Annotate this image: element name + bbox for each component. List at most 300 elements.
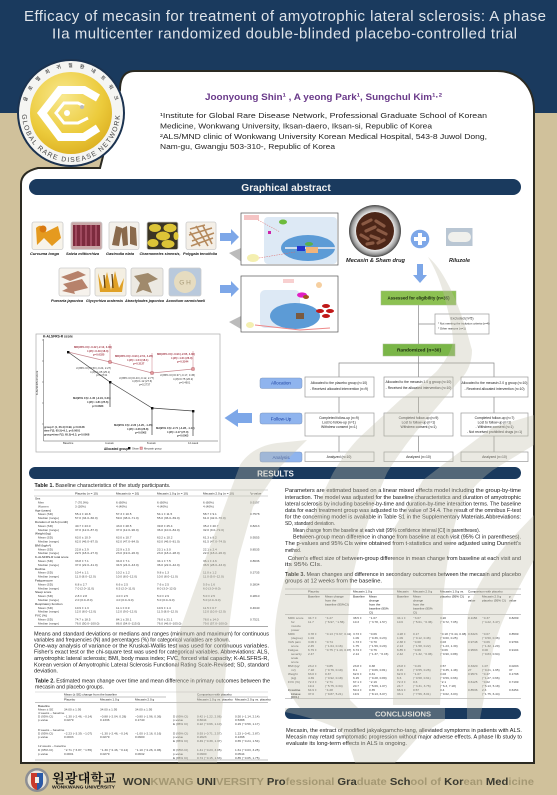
- table 3: secondary outcomes: (−5.69, 1.07): [369, 684, 387, 688]
- table 3: secondary outcomes: 37: [509, 668, 513, 672]
- table 2 notes (right column): The p-values and 95% CIs were obtained from t-statistics and were adjusted using Dunnett's: [285, 541, 521, 547]
- table 2: mean change and difference: E (95% CI): [173, 722, 188, 726]
- table 3: secondary outcomes: baseline (95%CI): [325, 602, 349, 606]
- table 3: secondary outcomes: 0.37: [325, 672, 331, 676]
- herb: Glycyrrhiza uralensis: [95, 268, 126, 296]
- table 3: secondary outcomes: 0.7199: [509, 680, 519, 684]
- table 3: secondary outcomes: 1.75: [353, 644, 359, 648]
- table 2: mean change and difference: 0.0003: [64, 735, 74, 739]
- herb labels row 1: Salvia miltiorrhiza: [66, 252, 99, 256]
- table 1: baseline characteristics: 4.0 ± 2.5: [116, 594, 128, 598]
- table 3: secondary outcomes: 0.3320: [468, 664, 478, 668]
- table 3: secondary outcomes: 0.6125: [468, 680, 478, 684]
- table 3: secondary outcomes: 62.6 ±: [353, 672, 362, 676]
- herb: Aconitum carmichaeli pill: [169, 268, 201, 296]
- table 1: baseline characteristics: 59.0 (38.0–71.0): [116, 516, 139, 520]
- table 2: mean change and difference: E (95% CI): [173, 756, 188, 760]
- table 3: secondary outcomes: −0.47: [482, 672, 490, 676]
- table 3: secondary outcomes: 0.9104: [509, 648, 519, 652]
- table 1: baseline characteristics: 57.3 ± 10.5: [116, 512, 132, 516]
- table 1: baseline characteristics: 4 (40%): [157, 504, 168, 508]
- table 3: secondary outcomes: 23.8 ±: [397, 664, 406, 668]
- line chart: K-ALSFRS-R score: MD(95% CI)=-0.93 (-2.51, 4.26): [115, 354, 153, 358]
- conclusions text: Mecasin, the extract of modified jakyakgamcho-tang, alleviated symptoms in patients with ALS.: [286, 728, 522, 734]
- table 3: secondary outcomes: (−7.56, 8.01): [413, 692, 431, 696]
- table 1: baseline characteristics: Mean (SD): [38, 512, 53, 516]
- table 3: secondary outcomes: 7.18: [308, 668, 314, 672]
- heading: conclusions: CONCLUSIONS: [375, 710, 431, 718]
- line chart: K-ALSFRS-R score: 4-week: [105, 441, 114, 445]
- table 3: secondary outcomes: 50.4 ±: [353, 688, 362, 692]
- herb labels row 2: Atractylodes japonica: [124, 299, 164, 303]
- table 3: secondary outcomes: value: [468, 598, 476, 602]
- herb labels row 2: [51, 299, 206, 303]
- table 3: secondary outcomes: 2.45: [308, 644, 314, 648]
- table 2: mean change and difference: p-value: [38, 752, 48, 756]
- table 1: baseline characteristics: 0.2810: [250, 594, 260, 598]
- table 3: secondary outcomes: 72.3 ±: [397, 680, 406, 684]
- line chart: K-ALSFRS-R score: t (df)=0.75 (26.2): [173, 377, 193, 381]
- table 3: secondary outcomes: 0.8536: [468, 688, 478, 692]
- table 2: mean change and difference: 0.0279: [64, 718, 74, 722]
- table 3: secondary outcomes: (−0.60, 0.25): [440, 636, 458, 640]
- table 2: mean change and difference: Mean ± SE: [38, 708, 53, 712]
- table 2: mean change and difference: D (95% CI): [173, 748, 188, 752]
- table 3: secondary outcomes: (−1.32, −0.06): [413, 652, 432, 656]
- footer: university name in Korean: WONKWANG UNIVERSITY: [52, 784, 115, 790]
- table 3: secondary outcomes: −0.13 (−0.67, 0.41): [325, 632, 351, 636]
- side label: follow-up: Follow-Up: [271, 416, 292, 422]
- table 1 notes: deviation.: [34, 668, 58, 674]
- table 1: baseline characteristics: 55.0 (36.0–69.0): [157, 516, 180, 520]
- line chart: K-ALSFRS-R score: p=0.2737: [139, 382, 151, 386]
- table 3: secondary outcomes: (−5.13, 5.18): [482, 684, 500, 688]
- table 1: baseline characteristics: 35.2 ± 20.7: [203, 524, 219, 528]
- table 2: mean change and difference: p-value: [38, 735, 48, 739]
- table 3: secondary outcomes: 0.6454: [509, 688, 519, 692]
- table 3: secondary outcomes: Baseline: [397, 594, 409, 598]
- table 1: baseline characteristics: 63.2 ± 10.2: [157, 536, 173, 540]
- table 1 title: Table 1. Baseline characteristics of the study participants.: [34, 483, 171, 489]
- table 3: secondary outcomes: 0.9574: [468, 672, 478, 676]
- affiliations: [160, 111, 487, 151]
- table 1: baseline characteristics: 12.0 (10.0–12.0): [203, 610, 226, 614]
- table 2: mean change and difference: −2.71 (−3.87, −1.55): [64, 748, 92, 752]
- table 3: secondary outcomes: 67.1 ±: [353, 680, 362, 684]
- table 2: mean change and difference: Mean (± SE) change from the baseline: [64, 692, 117, 696]
- label: riluzole: Riluzole: [449, 258, 470, 264]
- table 1: baseline characteristics: 62.0 (47.0–84.0): [116, 540, 139, 544]
- table 3: secondary outcomes: 0.6: [413, 680, 418, 684]
- table 1: baseline characteristics: Mean (SD): [38, 582, 53, 586]
- table 1: baseline characteristics: 5.0 (0.0–9.0): [157, 598, 175, 602]
- logo: global rare disease network: GLOBAL RARE DISEASE NETWORK: [22, 114, 120, 162]
- line chart: K-ALSFRS-R score: Md(95% CI)=-1.30 (-2.91, 0.21): [73, 396, 111, 400]
- table 1: baseline characteristics: 10.0 (8.0–12.0): [116, 575, 137, 579]
- table 3: secondary outcomes: (−0.55, 0.26): [413, 668, 431, 672]
- table 3: secondary outcomes: (−1.27, 0.66): [482, 676, 500, 680]
- table 1: baseline characteristics: Mecasin 2.0 g (n = 10): [203, 492, 234, 496]
- table 1: baseline characteristics: 10.9 ± 1.3: [75, 606, 89, 610]
- table 3: secondary outcomes: 0.17: [413, 632, 419, 636]
- table 3: secondary outcomes: 64.9 ±: [308, 688, 317, 692]
- table 1: baseline characteristics: 4 (40%): [116, 504, 127, 508]
- table 3: secondary outcomes: 0.03: [440, 640, 446, 644]
- table 3: secondary outcomes: p: [509, 594, 511, 598]
- table 3: secondary outcomes: 10.6: [397, 620, 403, 624]
- table 1: baseline characteristics: 23.0 (18.2–28.0): [157, 551, 180, 555]
- table 3: secondary outcomes: −2.19: [369, 680, 377, 684]
- table 3: secondary outcomes: VAS pain: [288, 640, 301, 644]
- line chart: K-ALSFRS-R score: p=0.3127: [133, 362, 145, 366]
- side label: analysis: [260, 452, 302, 462]
- table 3: secondary outcomes: Mecasin: [397, 590, 409, 594]
- table 3: secondary outcomes: −0.06: [482, 640, 490, 644]
- flow box: randomized: Randomized (n=30): [397, 348, 441, 354]
- table 1: baseline characteristics: Mean (SD): [38, 618, 53, 622]
- table 2: mean change and difference: Baseline: [38, 704, 50, 708]
- table 1: baseline characteristics: 5.9 ± 1.6: [203, 582, 215, 586]
- table 3: secondary outcomes: 3.06 ±: [308, 640, 317, 644]
- table 1 notes: Fisher's exact test or the chi-square test was used for categorical variables. Abbreviations: ALS,: [34, 650, 269, 656]
- table 3: secondary outcomes: −0.74: [325, 640, 333, 644]
- table 3: secondary outcomes: 1.07: [482, 664, 488, 668]
- table 3: secondary outcomes: Mean change: [325, 594, 344, 598]
- table 2: mean change and difference: 1.61 (−0.03, 3.25): [235, 748, 260, 752]
- table 1: baseline characteristics: 78.0 ± 14.0: [203, 618, 219, 622]
- table 2: mean change and difference: p-value: [173, 718, 183, 722]
- table 2 notes (right column): its 95% CIs.: [285, 562, 322, 568]
- table 1: baseline characteristics: 5.0 ± 2.9: [157, 594, 169, 598]
- table 1: baseline characteristics: 6 (60%): [203, 500, 214, 504]
- table 2: mean change and difference: 8 weeks – baseline: [38, 728, 65, 732]
- table 3: secondary outcomes: 6.15: [353, 676, 359, 680]
- table 3: secondary outcomes: baseline (95%: [369, 606, 389, 610]
- line chart: K-ALSFRS-R score: t (df)=-1.04 (18.1): [127, 358, 149, 362]
- table 3: secondary outcomes: from the: [413, 602, 425, 606]
- table 3: secondary outcomes: 0.9593: [468, 648, 478, 652]
- table 3: secondary outcomes: −0.06: [369, 632, 377, 636]
- table 1 notes: Means and standard deviations or medians and ranges (minimum and maximum) for continuous: [34, 632, 269, 638]
- table 2: mean change and difference: 0.1398: [235, 735, 245, 739]
- flow boxes: analysis: Analyzed (n=10): [406, 455, 431, 459]
- table 1: baseline characteristics: Respiratory function: [35, 602, 63, 606]
- line chart: K-ALSFRS-R score: t (df)=1.12 (27.6): [132, 379, 152, 383]
- table 3 title: [285, 572, 521, 584]
- table 3: secondary outcomes: 6.6: [397, 676, 402, 680]
- logo: global rare disease network: 글로벌희귀질환네트워크: [22, 62, 118, 102]
- table 2: mean change and difference: p-value: [173, 735, 183, 739]
- table 1: baseline characteristics: 22.9 ± 2.5: [116, 547, 130, 551]
- table 3: secondary outcomes: 2.14: [353, 652, 359, 656]
- line chart: K-ALSFRS-R score: p=0.3244: [177, 360, 189, 364]
- table 3: secondary outcomes: [285, 589, 521, 699]
- authors: Joonyoung Shin¹ , A yeong Park¹, Sungchul Kim¹·²: [205, 92, 442, 102]
- table 3: secondary outcomes: Mean: [369, 594, 377, 598]
- table 2: mean change and difference: −1.30 (−2.46, −0.14): [100, 748, 128, 752]
- flow boxes: follow-up: Lost to follow-up (n=1): [402, 420, 435, 424]
- table 3: secondary outcomes: Baseline: [308, 594, 320, 598]
- table 3: secondary outcomes: power: [291, 628, 299, 632]
- flow boxes: allocation: - Received allocated intervention (n=9): [310, 387, 368, 391]
- table 3: secondary outcomes: −0.29: [413, 664, 421, 668]
- table 3: secondary outcomes: 72.3 ±: [308, 680, 317, 684]
- table 1: baseline characteristics: 33.8 ± 7.1: [75, 559, 89, 563]
- table 1 notes: amyotrophic lateral sclerosis; BMI, body mass index; FVC, forced vital capacity; K-ALSFRS-R,: [34, 656, 269, 662]
- table 2: mean change and difference: D (95% CI): [38, 748, 53, 752]
- table 3: secondary outcomes: (−1.75, 6.44): [482, 692, 500, 696]
- table 3: secondary outcomes: (−1.32, 1.20): [482, 644, 500, 648]
- flow boxes: analysis: Analyzed (n=10): [327, 455, 351, 459]
- table 3: secondary outcomes: −2.1: [440, 680, 446, 684]
- heading: graphical abstract: [29, 179, 521, 195]
- icon: riluzole tablet: [446, 228, 472, 246]
- line chart: K-ALSFRS-R score: t (df)=-1.81 (25.6): [87, 400, 109, 404]
- table 2: mean change and difference: Mecasin 2.0 g vs. placebo: [235, 698, 271, 702]
- line chart: K-ALSFRS-R score: MD(95% CI)=-0.42 (-2.12, 3.06): [74, 345, 112, 349]
- table 1: baseline characteristics: 0.7521: [250, 618, 260, 622]
- table 2: mean change and difference: 0.85 (−0.05, 1.75): [235, 756, 260, 760]
- table 1: baseline characteristics: Median (range): [38, 563, 59, 567]
- table 2 notes (right column): Mean change from the baseline at each visit (95% confidence interval [CI] in parentheses).: [293, 528, 480, 534]
- icon: plus: [411, 230, 429, 248]
- table 3: secondary outcomes: Weight: [288, 672, 298, 676]
- flow box: excluded: [435, 314, 490, 334]
- table 3: secondary outcomes: Mecasin 2.0 g: [482, 594, 502, 598]
- table 3: secondary outcomes: (−0.36, 0.23): [369, 636, 387, 640]
- table 3: secondary outcomes: −0.70: [369, 640, 377, 644]
- table 2: mean change and difference: Mecasin 1.0 g: [100, 698, 120, 702]
- table 3: secondary outcomes: −0.68: [413, 640, 421, 644]
- side label: allocation: [260, 378, 302, 388]
- table 1: baseline characteristics: 43.0 ± 28.5: [116, 524, 132, 528]
- flow boxes: follow-up: Withdrew consent (n=1): [321, 425, 357, 429]
- table 3: secondary outcomes: Mecasin 2.0 g: [413, 590, 433, 594]
- table 3: secondary outcomes: MRC score: [288, 616, 304, 620]
- table 1: baseline characteristics: 0.3735: [250, 571, 260, 575]
- arrow: herbs to mechanism 2: [220, 281, 239, 297]
- table 3: secondary outcomes: 0.0203: [509, 664, 519, 668]
- table 1: baseline characteristics: Mean (SD): [38, 559, 53, 563]
- herb: Chaenomeles sinensis: [147, 222, 178, 250]
- flow boxes: allocation: [305, 377, 528, 397]
- table 1: baseline characteristics: Decline: [35, 567, 46, 571]
- table 2: mean change and difference: 0.0632: [135, 752, 145, 756]
- table 1: baseline characteristics: 11.5 ± 0.7: [203, 606, 217, 610]
- table 1: baseline characteristics: 0.9197: [250, 500, 260, 504]
- table 2: mean change and difference: 0.42 (−1.22, 2.06): [197, 714, 222, 718]
- table 1: baseline characteristics: Median (range): [38, 586, 59, 590]
- table 2: mean change and difference: 1.23 (−0.41, 2.87): [235, 732, 260, 736]
- table 1: baseline characteristics: 40.7 ± 23.0: [75, 524, 91, 528]
- table 2: mean change and difference: 0.1336: [100, 718, 110, 722]
- table 3: secondary outcomes: (−1.37, −0.15): [369, 652, 388, 656]
- flow box: randomized: [383, 344, 455, 356]
- table 3: secondary outcomes: (−1.59, 0.20): [369, 644, 387, 648]
- line chart: K-ALSFRS-R score: 8-week: [147, 441, 156, 445]
- table 2: mean change and difference: −2.23 (−3.39, −1.07): [64, 732, 92, 736]
- table 3: secondary outcomes: 0.9748: [468, 640, 478, 644]
- table 3: secondary outcomes: Baseline: [353, 594, 365, 598]
- table 1: baseline characteristics: Mecasin 1.0 g (n = 10): [157, 492, 188, 496]
- flow box: excluded: * Not meeting the inclusion criteria (n=4): [438, 322, 490, 326]
- table 3: secondary outcomes: −3.07: [413, 616, 421, 620]
- table 3: secondary outcomes: (−9.87, 5.21): [325, 692, 343, 696]
- side label: analysis: Analysis: [272, 455, 290, 460]
- table 1: baseline characteristics: 0.8636: [250, 559, 260, 563]
- table 3: secondary outcomes: (−6.3, 7.18): [440, 684, 456, 688]
- table 1: baseline characteristics: Median (range): [38, 540, 59, 544]
- table 1: baseline characteristics: 10.2 ± 1.2: [116, 571, 130, 575]
- table 3: secondary outcomes: kinase: [291, 692, 301, 696]
- table 2 notes (right column): SD, standard deviation.: [285, 521, 335, 527]
- line chart: K-ALSFRS-R score: d (95% CI)=0.50 (-0.24, 2.27): [76, 366, 111, 370]
- table 3: secondary outcomes: CI): [369, 610, 373, 614]
- line chart: K-ALSFRS-R score: t (df)=-0.49 (18.3): [87, 349, 109, 353]
- table 3: secondary outcomes: 33.1: [397, 692, 403, 696]
- conclusions text: evaluate its long-term effects in ALS is ongoing.: [286, 741, 407, 747]
- table 2: mean change and difference: −1.10 (−2.26, 0.06): [135, 748, 161, 752]
- table 3: secondary outcomes: Mecasin 1.0 g vs.: [440, 590, 464, 594]
- table 1: baseline characteristics: 0.8213: [250, 524, 260, 528]
- table 3 title: groups at 12 weeks from the baseline.: [285, 578, 382, 584]
- table 1: baseline characteristics: 76.0 ± 21.1: [157, 618, 173, 622]
- table 3: secondary outcomes: (−3.78, 1.57): [369, 620, 387, 624]
- flow box: excluded: * Other reasons (n=1): [438, 326, 466, 330]
- table 3: secondary outcomes: (−6.97, −1.56): [325, 620, 344, 624]
- table 2: mean change and difference: 0.49 (−0.39, 1.37): [197, 739, 222, 743]
- flow boxes: analysis: [305, 452, 528, 462]
- table 2: mean change and difference: −0.88 (−2.04, 0.28): [100, 714, 126, 718]
- table 3: secondary outcomes: (−8.13, 6.07): [369, 692, 387, 696]
- table 1: baseline characteristics: Median (range): [38, 528, 59, 532]
- table 1: baseline characteristics: 11.0 ± 1.2: [203, 571, 217, 575]
- table 1: baseline characteristics: 34.0 ± 7.1: [116, 559, 130, 563]
- table 1: baseline characteristics: 22.0 (18.2–26.0): [203, 551, 226, 555]
- table 1: baseline characteristics: 22.1 ± 2.4: [203, 547, 217, 551]
- table 3: secondary outcomes: −0.85: [325, 664, 333, 668]
- affiliations: Nam-gu, Gwangju 503-310-, Republic of Korea: [160, 142, 335, 151]
- table 1: baseline characteristics: Fatiguescore: [35, 578, 53, 582]
- table 2: mean change and difference: −1.00 (−2.16, 0.16): [135, 732, 161, 736]
- table 1: baseline characteristics: Mecasin (n = 10): [116, 492, 139, 496]
- table 3: secondary outcomes: 63.0 ±: [308, 672, 317, 676]
- table 3: secondary outcomes: 4.28 ±: [397, 632, 406, 636]
- line chart: K-ALSFRS-R score: p=0.2741: [96, 373, 108, 377]
- table 3: secondary outcomes: scale: [291, 656, 299, 660]
- line chart: K-ALSFRS-R score: t (df)=1.05 (25.1): [90, 370, 110, 374]
- table 1: baseline characteristics: Mean (SD): [38, 606, 53, 610]
- table 3: secondary outcomes: Creatine: [288, 688, 301, 692]
- table 2 title: [35, 678, 270, 690]
- line chart: K-ALSFRS-R score: d (95% CI)=0.37 (-0.17, 3.45): [160, 373, 195, 377]
- flow box: assessed for eligibility: Assessed for eligibility (n=35): [387, 296, 450, 300]
- table 3: secondary outcomes: muscle: [291, 624, 301, 628]
- table 1: baseline characteristics: 0.7578: [250, 512, 260, 516]
- flow boxes: allocation: Allocated to the placebo group (n=10): [311, 381, 367, 385]
- table 1: baseline characteristics: 7 (70.0%): [75, 500, 88, 504]
- table 3: secondary outcomes: 3.73 ±: [353, 632, 362, 636]
- table 3: secondary outcomes: for: [291, 620, 295, 624]
- table 2: mean change and difference: 0.0279: [100, 752, 110, 756]
- table 3: secondary outcomes: 62.6 ±: [397, 672, 406, 676]
- table 1: baseline characteristics: Mean (SD): [38, 524, 53, 528]
- table 1: baseline characteristics: 62.0 (46.0–87.0): [75, 540, 98, 544]
- header band: [0, 0, 557, 113]
- flow boxes: follow-up: - Not received prohibited drugs (n=1): [467, 430, 522, 434]
- table 1: baseline characteristics: Weight (kg): [35, 532, 51, 536]
- table 2: mean change and difference: Comparison with placebo: [197, 692, 232, 696]
- table 3: secondary outcomes: Placebo: [308, 590, 319, 594]
- table 2 notes (right column): Cohen's effect size of between-group difference in mean change from baseline at each visit and: [288, 556, 521, 562]
- table 1: baseline characteristics: [34, 490, 268, 626]
- table 3: secondary outcomes: 4.39: [308, 676, 314, 680]
- table 3: secondary outcomes: m²): [291, 668, 296, 672]
- table 1: baseline characteristics: 79.0 (57.0–100.0): [203, 621, 227, 625]
- herb photos row 1: [32, 222, 216, 250]
- table 3: secondary outcomes: (−0.72, 7.05): [440, 620, 458, 624]
- table 1: baseline characteristics: 34.1 ± 7.5: [157, 559, 171, 563]
- table 3: secondary outcomes: 0.57: [413, 688, 419, 692]
- table 1: baseline characteristics: 9.8 ± 1.3: [157, 571, 169, 575]
- table 2: mean change and difference: −1.30 (−2.46, −0.14): [64, 714, 92, 718]
- table 1: baseline characteristics: 12.0 (8.0–12.0): [75, 610, 96, 614]
- title: [24, 8, 546, 42]
- table 1: baseline characteristics: 74.7 ± 18.5: [75, 618, 91, 622]
- table 3: secondary outcomes: 19.4: [308, 684, 314, 688]
- table 1: baseline characteristics: Median (range): [38, 575, 59, 579]
- table 1: baseline characteristics: 37.0 (22.0–41.0): [75, 563, 98, 567]
- table 1: baseline characteristics: 76.0 (46.0–105.0): [157, 621, 181, 625]
- table 3: secondary outcomes: (−0.06, 0.81): [369, 668, 387, 672]
- table 1: baseline characteristics: 5.0 ± 2.5: [203, 594, 215, 598]
- table 3: secondary outcomes: 0.8299: [509, 616, 519, 620]
- table 1: baseline characteristics: 0.9555: [250, 536, 260, 540]
- herb photos row 2: [59, 268, 201, 296]
- table 1: baseline characteristics: 36.1 ± 4.6: [203, 559, 217, 563]
- table 2: mean change and difference: p-value: [173, 752, 183, 756]
- table 3: secondary outcomes: 6.79 ±: [308, 648, 317, 652]
- table 1: baseline characteristics: 11.1 ± 0.9: [116, 606, 130, 610]
- table 3: secondary outcomes: 0.00: [482, 648, 488, 652]
- table 1: baseline characteristics: 34.5 (24.0–43.0): [116, 563, 139, 567]
- line chart: K-ALSFRS-R score: d (95% CI)=0.43 (-0.12, 2.77): [119, 376, 154, 380]
- footer: university name in Korean: 원광대학교: [52, 768, 116, 787]
- table 3: secondary outcomes: (IU/L): [291, 695, 299, 699]
- table 3: secondary outcomes: −1.07: [413, 672, 421, 676]
- mechanism diagram 1: [229, 213, 338, 265]
- table 1: baseline characteristics: 37.0 (12.0–87.0): [75, 528, 98, 532]
- line chart: K-ALSFRS-R score: Md(95% CI)=-2.23 (-4.20, -1.45): [114, 423, 153, 427]
- table 3: secondary outcomes: 23.8 ±: [353, 664, 362, 668]
- table 3: secondary outcomes: 38.5 ±: [353, 616, 362, 620]
- table 3: secondary outcomes: −0.07: [482, 632, 490, 636]
- herb labels row 1: Chaenomeles sinensis,: [140, 252, 180, 256]
- table 2: mean change and difference: 0.0279: [100, 735, 110, 739]
- table 2: mean change and difference: 4 weeks – baseline: [38, 711, 65, 715]
- table 1: baseline characteristics: 36.0 (22.0–42.0): [157, 563, 180, 567]
- table 1: baseline characteristics: 61.5 (47.0–74.0): [203, 540, 226, 544]
- table 2 title: Table 2. Estimated mean change over time and mean difference in primary outcomes between the: [35, 678, 270, 684]
- affiliations: Medicine, Wonkwang University, Iksan-daero, Iksan-si, Republic of Korea: [160, 122, 432, 130]
- table 3: secondary outcomes: from the: [369, 602, 381, 606]
- table 1: baseline characteristics: 12.0 (9.0–12.0): [116, 610, 137, 614]
- table 3: secondary outcomes: 37.0: [308, 692, 314, 696]
- table 1: baseline characteristics: K-ALSFRS-R total score: [35, 555, 69, 559]
- table 1: baseline characteristics: 76.0 (50.0–100.0): [75, 621, 99, 625]
- heading: conclusions: [285, 708, 521, 719]
- arrow: flow to chart: [224, 409, 252, 427]
